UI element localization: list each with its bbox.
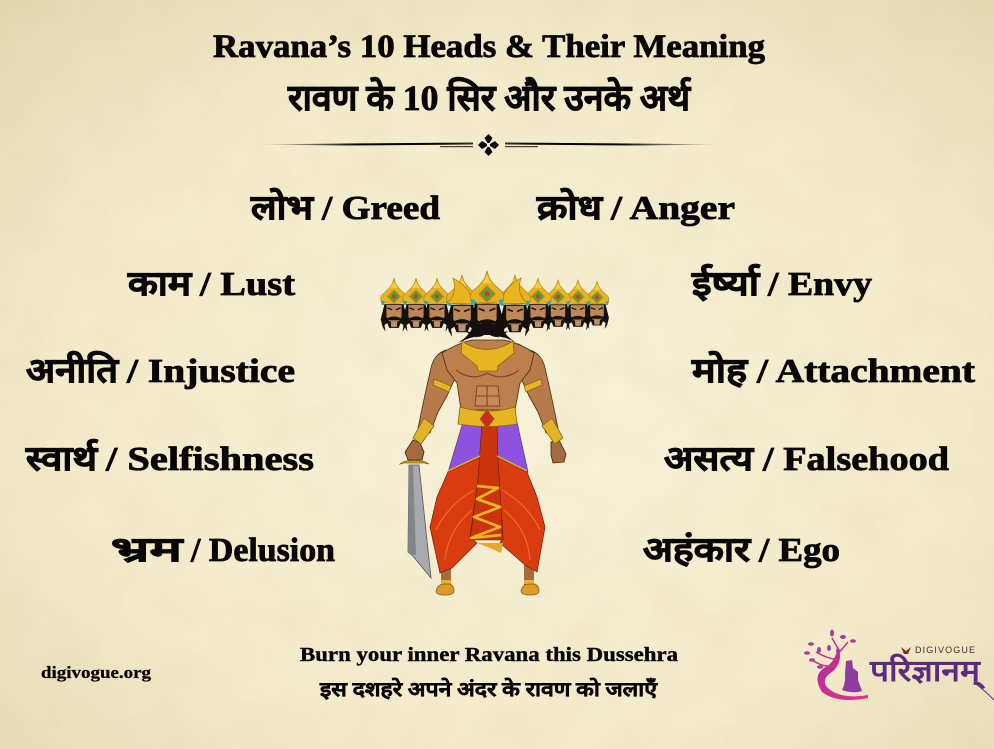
- label: Greed: लोभ: [250, 187, 314, 227]
- label: Lust: काम: [127, 266, 193, 303]
- label: Falsehood: असत्य: [664, 441, 754, 478]
- label: Anger: / Anger: [610, 190, 735, 227]
- label: Selfishness: स्वार्थ: [25, 438, 99, 478]
- title: Hindi: रावण के 10 सिर और उनके अर्थ: [287, 77, 692, 118]
- illustration: ten-headed Ravana: [381, 271, 609, 595]
- purple lower garment: [448, 422, 528, 472]
- label: Ego: [643, 532, 840, 569]
- label: Falsehood: [664, 441, 949, 478]
- red dhoti: [430, 422, 545, 573]
- label: Ego: अहंकार: [643, 532, 751, 569]
- heads: outer ones first: [381, 271, 609, 346]
- label: Selfishness: / Selfishness: [105, 441, 314, 478]
- label: Envy: / Envy: [767, 266, 872, 303]
- sword: [400, 461, 431, 578]
- logo brand name: DIGIVOGUE: [915, 645, 975, 655]
- label: Ego: / Ego: [758, 532, 840, 569]
- title: English: Ravana’s 10 Heads & Their Meaning: [213, 29, 766, 65]
- logo meditating figure: [842, 660, 862, 692]
- label: Envy: ईर्ष्या: [691, 263, 761, 303]
- label: Delusion: / Delusion: [190, 532, 335, 569]
- arms: [405, 350, 566, 463]
- label: Delusion: [111, 532, 335, 569]
- label: Falsehood: / Falsehood: [762, 441, 949, 478]
- label: Injustice: [26, 350, 295, 390]
- label: Injustice: / Injustice: [126, 353, 295, 390]
- footer: English slogan: Burn your inner Ravana this Dussehra: [300, 644, 678, 666]
- label: Envy: [691, 263, 872, 303]
- label: Delusion: भ्रम: [111, 532, 185, 569]
- logo wordmark: परिज्ञानम्: [869, 653, 986, 690]
- website: digivogue.org: digivogue.org: [41, 663, 152, 682]
- ornamental divider: [252, 134, 725, 156]
- torso: [442, 340, 534, 410]
- label: Attachment: [691, 350, 976, 390]
- label: Greed: / Greed: [321, 190, 440, 227]
- footer: Hindi slogan: इस दशहरे अपने अंदर के रावण को जलाएँ: [319, 677, 658, 701]
- label: Lust: / Lust: [199, 266, 296, 303]
- label: Anger: क्रोध: [536, 187, 603, 227]
- label: Attachment: मोह: [691, 350, 749, 390]
- label: Lust: [127, 266, 296, 303]
- necklace: [461, 341, 514, 371]
- label: Anger: [536, 187, 735, 227]
- logo wordmark: [869, 653, 994, 700]
- label: Greed: [250, 187, 440, 227]
- logo tree: [804, 630, 868, 700]
- label: Attachment: / Attachment: [756, 353, 976, 390]
- logo: Digivogue Parigyanam: [804, 630, 994, 700]
- gold sash: [471, 486, 501, 538]
- legs and sandals: [436, 565, 539, 595]
- label: Injustice: अनीति: [26, 350, 120, 390]
- belt: [458, 407, 517, 428]
- label: Selfishness: [25, 438, 314, 478]
